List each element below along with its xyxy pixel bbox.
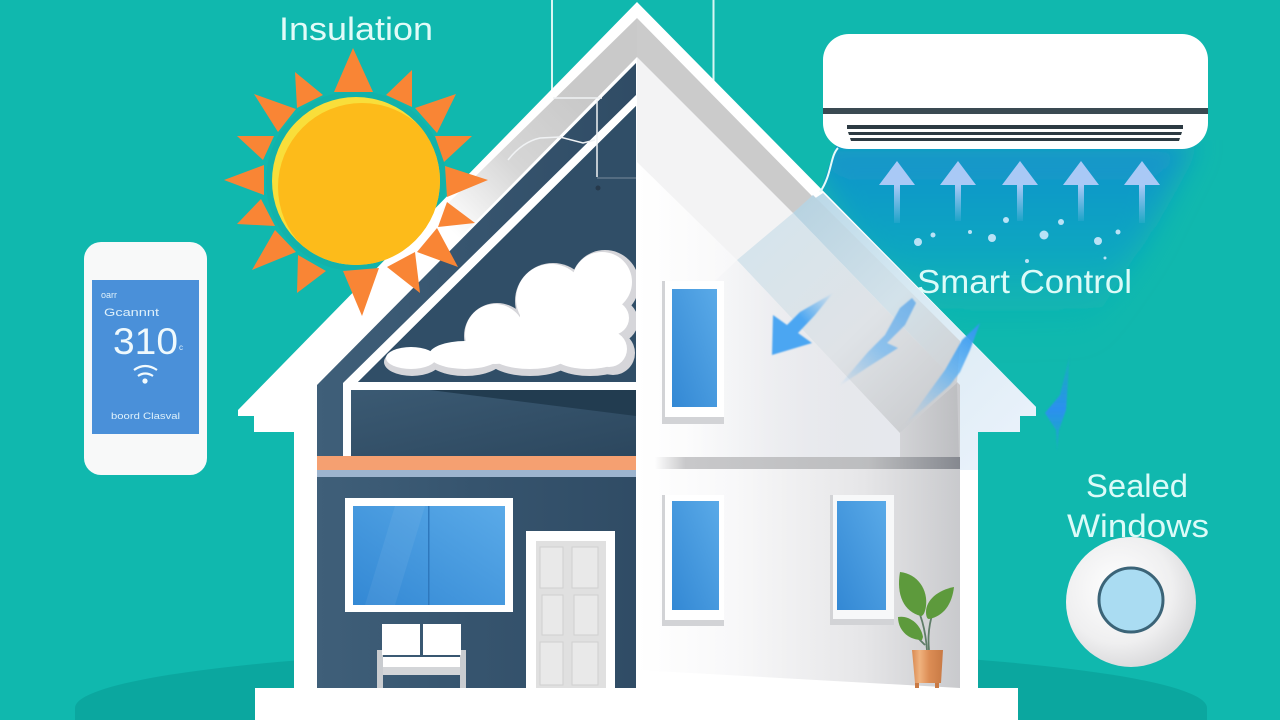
hanging line right [712, 0, 714, 130]
arrow 5 [1124, 161, 1160, 223]
plant pot [912, 650, 943, 683]
right roof band [637, 18, 813, 213]
lower dark wall [317, 477, 636, 688]
blue airflow arrow 4 [1045, 353, 1070, 455]
blue-tinted roof band [793, 195, 960, 383]
plant leaves [898, 572, 954, 640]
orange insulation strip [317, 456, 636, 470]
attic room [351, 390, 636, 456]
Sealed: Sealed [1086, 468, 1188, 504]
left dark roof band [317, 63, 636, 456]
large left window [345, 498, 513, 612]
window shadow [662, 281, 724, 424]
hanging line left [551, 0, 553, 90]
bench rail [383, 667, 460, 675]
pot feet [915, 683, 939, 688]
attic triangle [358, 106, 636, 382]
sun halo ring [266, 91, 446, 271]
arrow 4 [1063, 161, 1099, 221]
window frame [345, 498, 513, 612]
gable shadow [900, 383, 959, 457]
gauge disc [1066, 537, 1196, 667]
screen reading: 310 [113, 321, 178, 362]
lower wall face tint [690, 260, 900, 457]
window mullion [428, 506, 430, 605]
cool air arrows [879, 161, 1160, 223]
sun disc [278, 103, 446, 271]
blue airflow arrow 2 [838, 298, 916, 387]
AC body [823, 34, 1208, 149]
potted plant [898, 572, 954, 688]
wifi icon [134, 366, 157, 382]
window frame [665, 281, 724, 417]
door panels [540, 547, 598, 685]
window frame [665, 495, 724, 620]
AC seam [823, 108, 1208, 114]
gauge lens [1099, 568, 1163, 632]
house [238, 2, 1036, 720]
screen footer: boord Clasval [111, 411, 180, 422]
bench seat [383, 657, 460, 667]
blue airflow arrow 3 [905, 323, 980, 425]
white inner roof line [343, 95, 636, 456]
lower middle window [662, 495, 724, 626]
roof cracks [508, 98, 636, 178]
smart thermostat phone [84, 242, 207, 475]
label: Sealed Windows [1067, 468, 1209, 544]
right wall face [637, 60, 960, 688]
screen label small: oarr [101, 290, 117, 300]
upper right window [662, 281, 724, 424]
phone body [84, 242, 207, 475]
bench cushions [382, 624, 461, 655]
window glass [672, 289, 717, 407]
arrow 1 [879, 161, 915, 223]
cloud insulation [384, 250, 639, 376]
ground ellipse [75, 648, 1207, 720]
screen unit: c [179, 343, 183, 352]
blue-grey strip [317, 470, 636, 477]
door [526, 531, 615, 688]
air conditioner [823, 34, 1208, 149]
upper light stripe [637, 57, 793, 260]
AC vent [847, 125, 1183, 141]
bench [377, 624, 466, 688]
sealed window gauge [1066, 537, 1196, 667]
AC power cord [820, 148, 838, 192]
bench legs [377, 650, 466, 688]
mid translucent band [737, 213, 957, 433]
window glare [365, 506, 425, 605]
right eave tint [793, 193, 1036, 470]
door frame [526, 531, 615, 688]
window shadow [830, 495, 894, 625]
roof crack dot [596, 186, 600, 190]
blue airflow arrow 1 [772, 293, 833, 355]
air-conditioner cool air haze [822, 146, 1195, 288]
arrow 3 [1002, 161, 1038, 221]
cloud body [386, 252, 632, 369]
left roof band [390, 18, 637, 278]
right belt course [655, 457, 960, 469]
phone screen [92, 280, 199, 434]
arrow 2 [940, 161, 976, 221]
window glass [837, 501, 886, 610]
window glass [672, 501, 719, 610]
house white shell [238, 2, 1036, 720]
sun rays [224, 48, 488, 316]
attic wedge shadow [430, 390, 636, 416]
window glass [353, 506, 505, 605]
plant stems [912, 610, 933, 650]
label: Insulation: Insulation [279, 11, 433, 47]
Windows: Windows [1067, 508, 1209, 544]
foundation fade [637, 670, 960, 688]
label: Smart Control: Smart Control [917, 263, 1132, 300]
screen label: Gcannnt [104, 307, 159, 319]
lower right window [830, 495, 894, 625]
door leaf [536, 541, 606, 688]
window shadow [662, 495, 724, 626]
sun [224, 48, 488, 316]
condensation dots [914, 217, 1120, 263]
sun disc highlight [272, 97, 440, 265]
cloud shadow [384, 250, 639, 376]
window frame [833, 495, 894, 619]
